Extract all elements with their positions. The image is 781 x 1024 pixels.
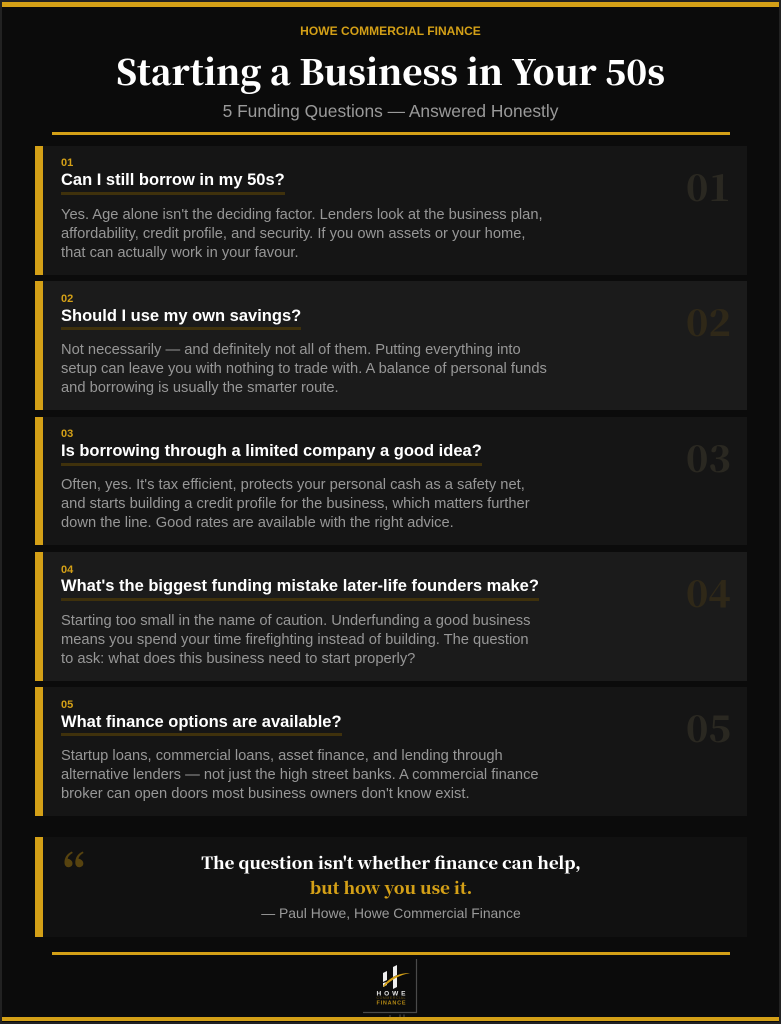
answer text 5 (61, 748, 539, 802)
watermark number 02: 02 (686, 293, 731, 347)
watermark number 01: 01 (686, 158, 731, 212)
question heading 4: What's the biggest funding mistake later-life founders make? (61, 577, 539, 595)
panel: question 3 (35, 417, 747, 545)
number label 04: 04 (61, 564, 73, 576)
answer text 1: Yes. Age alone isn't the deciding factor. Lenders look at the business plan, (61, 207, 543, 223)
answer text 4: to ask: what does this business need to start properly? (61, 651, 415, 667)
answer text 3: Often, yes. It's tax efficient, protects your personal cash as a safety net, (61, 477, 525, 493)
answer text 2: setup can leave you with nothing to trade with. A balance of personal funds (61, 361, 547, 377)
watermark number 03: 03 (686, 429, 731, 483)
number label 05: 05 (61, 699, 73, 711)
bottom divider (52, 952, 730, 955)
top divider (52, 132, 730, 135)
panel: question 1 (35, 146, 747, 275)
answer text 1: that can actually work in your favour. (61, 245, 299, 261)
panel: question 5 (35, 687, 747, 816)
number label 02: 02 (61, 293, 73, 305)
answer text 1: affordability, credit profile, and security. If you own assets or your home, (61, 226, 526, 242)
logo: HOWE (376, 990, 406, 998)
answer text 2: Not necessarily — and definitely not all of them. Putting everything into (61, 342, 521, 358)
watermark number 04: 04 (686, 564, 731, 618)
number label 03: 03 (61, 428, 73, 440)
number label 01: 01 (61, 157, 73, 169)
panel: closing quote (35, 837, 747, 937)
top gold bar (2, 2, 779, 7)
quote text (201, 850, 581, 899)
answer text 5: Startup loans, commercial loans, asset finance, and lending through (61, 748, 503, 764)
logo: FINANCE (376, 1000, 406, 1006)
title: Starting a Business in Your 50s (116, 45, 665, 95)
logo: COMMERCIAL (376, 996, 406, 1000)
brand eyebrow: HOWE COMMERCIAL FINANCE (300, 24, 481, 38)
answer text 3 (61, 477, 530, 531)
answer text 1 (61, 207, 543, 261)
watermark number 05: 05 (686, 699, 731, 753)
bottom gold bar (2, 1017, 779, 1021)
quote attribution: — Paul Howe, Howe Commercial Finance (261, 905, 521, 921)
answer text 2 (61, 342, 547, 396)
answer text 5: broker can open doors most business owners don't know exist. (61, 786, 470, 802)
answer text 2: and borrowing is usually the smarter route. (61, 380, 339, 396)
question heading 5: What finance options are available? (61, 713, 342, 731)
answer text 5: alternative lenders — not just the high street banks. A commercial finance (61, 767, 539, 783)
quote text: The question isn't whether finance can help, (201, 850, 581, 874)
answer text 3: and starts building a credit profile for the business, which matters further (61, 496, 530, 512)
question heading 2: Should I use my own savings? (61, 307, 301, 325)
panel: question 4 (35, 552, 747, 681)
answer text 4 (61, 613, 530, 667)
answer text 4: means you spend your time firefighting instead of building. The question (61, 632, 529, 648)
icon: quote mark: “ (41, 840, 87, 906)
subtitle: 5 Funding Questions — Answered Honestly (223, 101, 558, 121)
answer text 4: Starting too small in the name of caution. Underfunding a good business (61, 613, 530, 629)
quote text: but how you use it. (310, 875, 472, 899)
logo (363, 959, 418, 1017)
panel: question 2 (35, 281, 747, 410)
question heading 3: Is borrowing through a limited company a good idea? (61, 442, 482, 460)
question heading 1: Can I still borrow in my 50s? (61, 171, 285, 189)
answer text 3: down the line. Good rates are available with the right advice. (61, 515, 454, 531)
